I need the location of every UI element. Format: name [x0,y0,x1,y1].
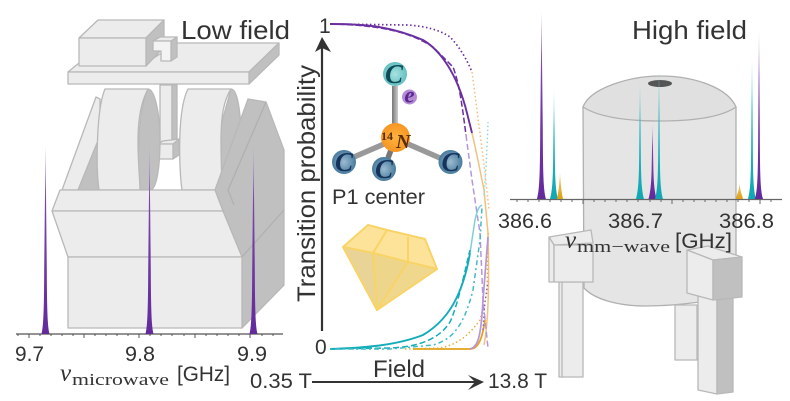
magnet base [52,99,284,328]
P1 center molecule [332,59,462,209]
atom: left carbon: C [335,147,354,177]
axis title: ν [565,227,577,254]
magnet coils [97,89,241,190]
low field spectrum: 9.9 [237,343,267,366]
transition probability chart [250,15,547,393]
heading: high field: High field [632,15,747,45]
electron: e [404,82,415,108]
microwave source box [68,20,279,84]
atom: nitrogen: N [395,131,412,153]
atom: right carbon: C [441,147,460,177]
low field spectrum: 9.8 [125,343,155,366]
high field spectrum [498,12,782,256]
low field spectrum [15,145,283,389]
high field magnet [549,76,742,394]
axis title: mm−wave [577,237,670,256]
left leg [549,230,593,377]
atom: top carbon: C [385,59,404,89]
atom: nitrogen: 14 [381,129,393,143]
atom: middle carbon: C [375,154,394,184]
peaks [42,145,50,334]
axis title: [GHz] [177,363,230,386]
transition probability chart: 13.8 T [488,370,547,393]
label: P1 center: P1 center [332,186,425,209]
axis [16,333,283,335]
transition probability chart: 0 [315,336,327,359]
waveguide stem [157,85,179,159]
electron [402,82,417,108]
heading: low field: Low field [181,15,290,45]
low field magnet [52,20,284,328]
atom: nitrogen [381,123,412,153]
x labels: 0.35 T [250,370,312,393]
x axis title: Field [373,356,425,383]
axis title: microwave [72,370,169,389]
tick labels: 386.6 [498,210,552,233]
cylinder magnet [583,76,736,306]
axis title: [GHz] [675,230,732,253]
icon: diamond [343,225,437,310]
back right leg [675,305,697,360]
high field spectrum: 386.7 [608,210,663,233]
curves [330,24,489,349]
axis title [565,227,732,256]
y axis title: Transition probability [293,64,321,302]
high field spectrum: 386.8 [719,210,774,233]
left pole wedge [62,97,100,190]
axis title: ν [60,360,72,387]
axis title [60,360,230,389]
axis [510,198,782,200]
bonds [354,86,440,158]
y labels: 1 [319,15,331,38]
y axis arrow [315,37,331,331]
peaks [537,12,546,199]
x axis arrow [312,375,484,390]
front right leg [687,246,742,394]
tick labels: 9.7 [15,343,44,366]
